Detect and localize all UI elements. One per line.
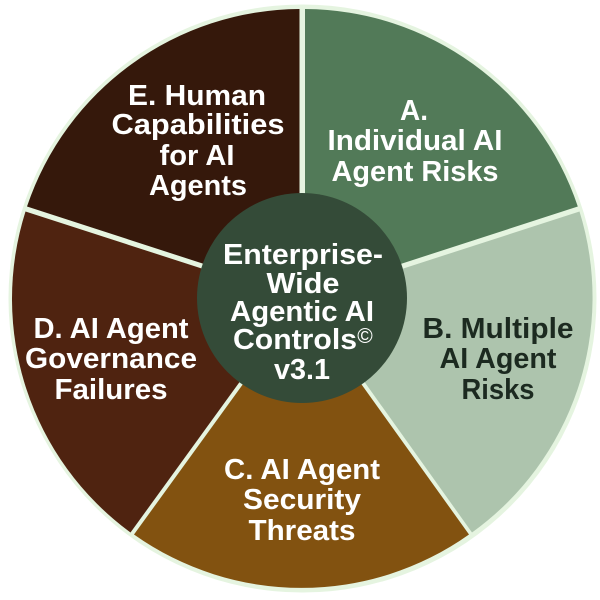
label A: A. (400, 95, 428, 127)
panel: C. AI Agent Security Threats (134, 302, 469, 588)
label D: D. AI Agent (34, 313, 189, 345)
center title: v3.1 (274, 354, 330, 386)
panel: E. Human Capabilities for AI Agents (27, 9, 300, 295)
label E: Agents (149, 170, 247, 202)
label C: Threats (248, 515, 356, 547)
label A (328, 95, 502, 188)
center title: Enterprise- (223, 239, 383, 271)
center title: Controls (233, 324, 357, 356)
label E: Capabilities (112, 109, 284, 141)
label C: Security (243, 484, 361, 516)
label B (422, 313, 574, 406)
label E: E. Human (128, 80, 266, 112)
label B: Risks (462, 374, 534, 406)
panel: D. AI Agent Governance Failures (12, 212, 299, 532)
label B: AI Agent (440, 343, 557, 375)
center title: Wide (266, 268, 340, 300)
label D: Governance (25, 343, 197, 375)
label A: Agent Risks (332, 156, 498, 188)
label E (112, 80, 284, 202)
label A: Individual AI (328, 125, 502, 157)
label D (25, 313, 197, 406)
center title: Agentic AI (230, 296, 374, 328)
label E: for AI (160, 140, 234, 172)
center hub (197, 193, 407, 403)
panel: B. Multiple AI Agent Risks (306, 212, 593, 532)
label D: Failures (54, 374, 168, 406)
center title: © (357, 325, 373, 348)
label B: B. Multiple (422, 313, 574, 345)
center title (223, 239, 383, 386)
label C: C. AI Agent (224, 454, 380, 486)
panel: A. Individual AI Agent Risks (305, 9, 578, 298)
label C (224, 454, 380, 547)
